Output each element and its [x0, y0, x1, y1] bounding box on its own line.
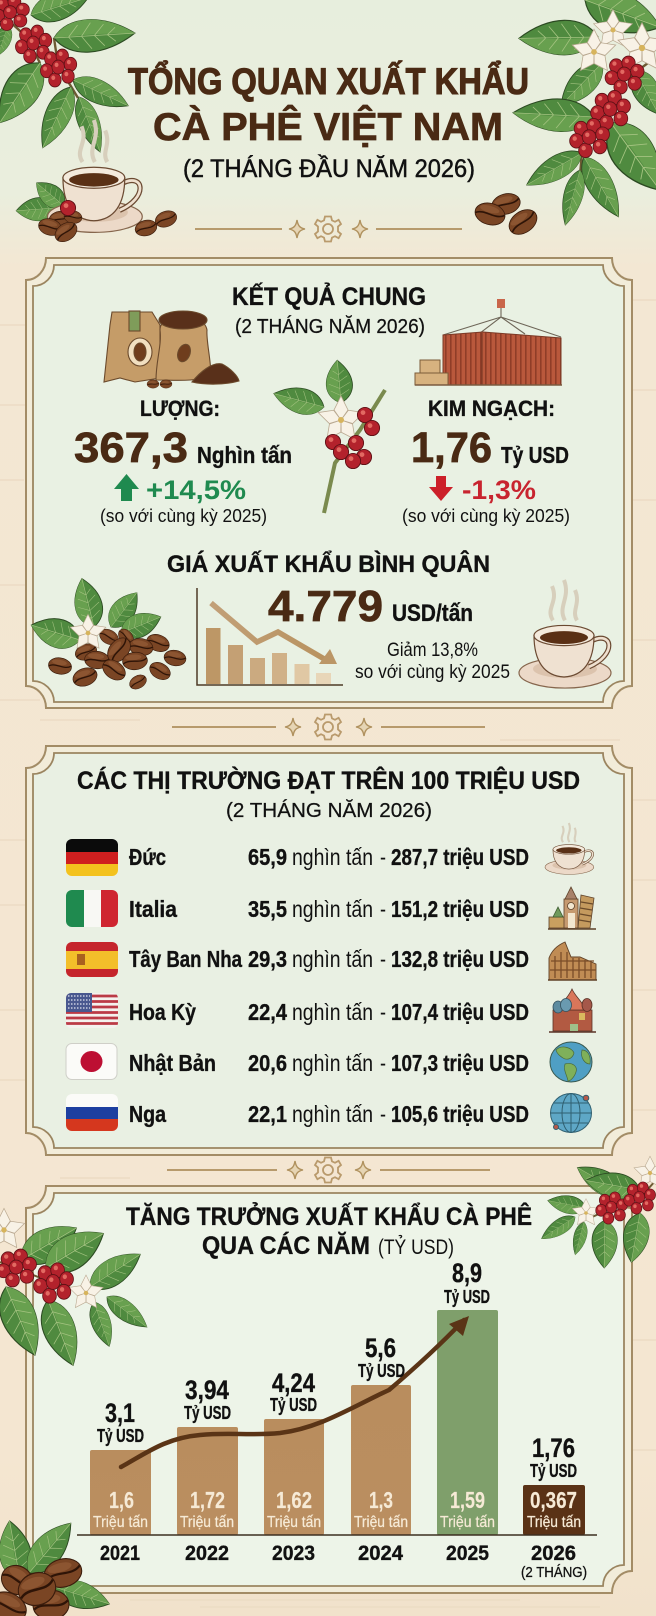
- row: Germany: 287,7 triệu USD: [391, 844, 529, 870]
- heading: average export price: GIÁ XUẤT KHẨU BÌNH QUÂN: [167, 550, 490, 578]
- stat: export value: [402, 396, 570, 526]
- panel: overall results: [26, 258, 632, 708]
- heading: overall results: KẾT QUẢ CHUNG: [232, 281, 426, 311]
- row: Spain: Tây Ban Nha: [129, 946, 242, 972]
- values: million tons: Triệu tấn: [354, 1514, 408, 1531]
- stat: average price: so với cùng kỳ 2025: [355, 661, 510, 683]
- stat: export value: -1,3%: [462, 475, 536, 505]
- heading: export growth: (TỶ USD): [378, 1236, 454, 1259]
- stat: export volume: 367,3: [74, 424, 188, 472]
- year labels: [100, 1542, 587, 1581]
- row: Japan: [66, 1042, 592, 1082]
- row: Germany: -: [380, 844, 386, 870]
- row: Italy: -: [380, 896, 386, 922]
- values: billion USD: 3,94: [185, 1375, 229, 1405]
- title: [128, 59, 529, 183]
- stat: export volume: Nghìn tấn: [197, 442, 292, 468]
- row: United States: nghìn tấn: [292, 999, 373, 1025]
- values: billion USD: 4,24: [272, 1368, 315, 1398]
- values: million tons: Triệu tấn: [93, 1514, 148, 1531]
- row: United States: -: [380, 999, 386, 1025]
- row: Japan: Nhật Bản: [129, 1050, 216, 1076]
- icon: coffee cup right: [519, 580, 611, 688]
- heading: overall results: [232, 281, 426, 338]
- values: billion USD: 5,6: [365, 1333, 396, 1363]
- stat: export volume: +14,5%: [146, 475, 246, 505]
- values: million tons: 1,72: [190, 1487, 225, 1513]
- row: Russia: Nga: [129, 1101, 166, 1127]
- values: million tons: 0,367: [530, 1487, 577, 1513]
- stat: average price: USD/tấn: [392, 600, 473, 627]
- icon: beans with leaves: [27, 575, 187, 692]
- row: Japan: 20,6: [248, 1050, 287, 1076]
- divider 3: [167, 1158, 490, 1182]
- values: billion USD: Tỷ USD: [444, 1287, 490, 1307]
- panel: markets above 100 million USD: [26, 746, 632, 1155]
- row: Russia: 22,1: [248, 1101, 287, 1127]
- row: Germany: nghìn tấn: [292, 844, 373, 870]
- row: Italy: Italia: [129, 896, 177, 922]
- bar chart: export value by year: [77, 1258, 597, 1581]
- row: Germany: 65,9: [248, 844, 287, 870]
- row: Japan: 107,3 triệu USD: [391, 1050, 529, 1076]
- year labels: 2026: [531, 1542, 576, 1565]
- row: United States: Hoa Kỳ: [129, 999, 196, 1025]
- values: billion USD: Tỷ USD: [97, 1426, 144, 1446]
- values: million tons: Triệu tấn: [527, 1514, 581, 1531]
- row: Spain: [66, 942, 597, 980]
- values: million tons: Triệu tấn: [440, 1514, 495, 1531]
- year labels: 2022: [185, 1542, 229, 1565]
- icon: coffee cup with beans top-left: [15, 120, 179, 246]
- stat: average price: Giảm 13,8%: [387, 639, 478, 661]
- divider 2: [172, 714, 485, 740]
- row: Spain: 29,3: [248, 946, 287, 972]
- row: Spain: nghìn tấn: [292, 946, 373, 972]
- title: CÀ PHÊ VIỆT NAM: [153, 105, 503, 149]
- divider 1: [195, 216, 462, 242]
- values: million tons: [93, 1487, 581, 1531]
- row: Russia: nghìn tấn: [292, 1101, 373, 1127]
- stat: export value: 1,76: [411, 424, 492, 472]
- decoration: panel 3 top-right branch: [537, 1156, 656, 1268]
- values: billion USD: 1,76: [532, 1433, 575, 1463]
- year labels: 2021: [100, 1542, 140, 1565]
- decoration: panel 3 left branch: [0, 1208, 153, 1371]
- heading: export growth: [126, 1201, 532, 1260]
- values: billion USD: Tỷ USD: [530, 1461, 577, 1481]
- values: million tons: 1,59: [450, 1487, 485, 1513]
- values: billion USD: Tỷ USD: [270, 1395, 317, 1415]
- stat: average price: [268, 582, 510, 683]
- row: Russia: 105,6 triệu USD: [391, 1101, 529, 1127]
- row: Russia: -: [380, 1101, 386, 1127]
- values: million tons: Triệu tấn: [180, 1514, 234, 1531]
- stat: export value: Tỷ USD: [501, 442, 569, 468]
- values: million tons: 1,6: [109, 1487, 134, 1513]
- heading: export growth: QUA CÁC NĂM: [202, 1231, 370, 1260]
- row: Italy: 35,5: [248, 896, 287, 922]
- row: Japan: -: [380, 1050, 386, 1076]
- row: Spain: 132,8 triệu USD: [391, 946, 529, 972]
- icon: coffee branch centre: [271, 359, 385, 513]
- row: Italy: [66, 887, 596, 929]
- stat: average price: 4.779: [268, 582, 383, 631]
- year labels: 2024: [358, 1542, 403, 1565]
- icon: coffee beans top-right: [473, 191, 542, 239]
- values: million tons: Triệu tấn: [267, 1514, 321, 1531]
- row: United States: 22,4: [248, 999, 287, 1025]
- row: Spain: -: [380, 946, 386, 972]
- title: TỔNG QUAN XUẤT KHẨU: [128, 59, 529, 102]
- values: million tons: 1,3: [369, 1487, 393, 1513]
- values: million tons: 1,62: [276, 1487, 312, 1513]
- heading: markets: [77, 765, 580, 822]
- stat: export volume: LƯỢNG:: [140, 396, 220, 421]
- row: Germany: [66, 823, 594, 876]
- year labels: 2025: [446, 1542, 489, 1565]
- panel: export growth over the years: [26, 1186, 632, 1593]
- decoration: panel 3 bottom-left beans: [0, 1514, 113, 1616]
- values: billion USD: Tỷ USD: [184, 1403, 231, 1423]
- year labels: 2023: [272, 1542, 315, 1565]
- values: billion USD: 8,9: [452, 1258, 482, 1288]
- row: Germany: Đức: [129, 844, 166, 870]
- decoration: top-right coffee branch: [512, 0, 656, 228]
- chart: falling price bars: [197, 588, 343, 685]
- row: Russia: [66, 1094, 592, 1132]
- icon: shipping container: [415, 299, 562, 385]
- values: billion USD: [97, 1258, 577, 1481]
- title: (2 THÁNG ĐẦU NĂM 2026): [183, 154, 475, 183]
- row: Japan: nghìn tấn: [292, 1050, 373, 1076]
- row: United States: 107,4 triệu USD: [391, 999, 529, 1025]
- icon: coffee bags: [104, 311, 239, 388]
- values: billion USD: 3,1: [105, 1398, 135, 1428]
- stat: export value: (so với cùng kỳ 2025): [402, 505, 570, 526]
- bars: [77, 1310, 597, 1535]
- heading: overall results: (2 THÁNG NĂM 2026): [235, 315, 425, 338]
- heading: markets: (2 THÁNG NĂM 2026): [226, 799, 432, 822]
- trend arrow: [121, 1316, 469, 1467]
- stat: export volume: [74, 396, 292, 526]
- row: Italy: 151,2 triệu USD: [391, 896, 529, 922]
- row: United States: [66, 989, 596, 1032]
- row: Italy: nghìn tấn: [292, 896, 373, 922]
- year labels: (2 THÁNG): [521, 1564, 587, 1581]
- heading: export growth: TĂNG TRƯỞNG XUẤT KHẨU CÀ PHÊ: [126, 1201, 532, 1231]
- stat: export volume: (so với cùng kỳ 2025): [100, 505, 267, 526]
- decoration: top-left coffee branch: [0, 0, 136, 156]
- values: billion USD: Tỷ USD: [358, 1361, 405, 1381]
- stat: export value: KIM NGẠCH:: [428, 396, 555, 421]
- heading: markets: CÁC THỊ TRƯỜNG ĐẠT TRÊN 100 TRIỆU USD: [77, 765, 580, 795]
